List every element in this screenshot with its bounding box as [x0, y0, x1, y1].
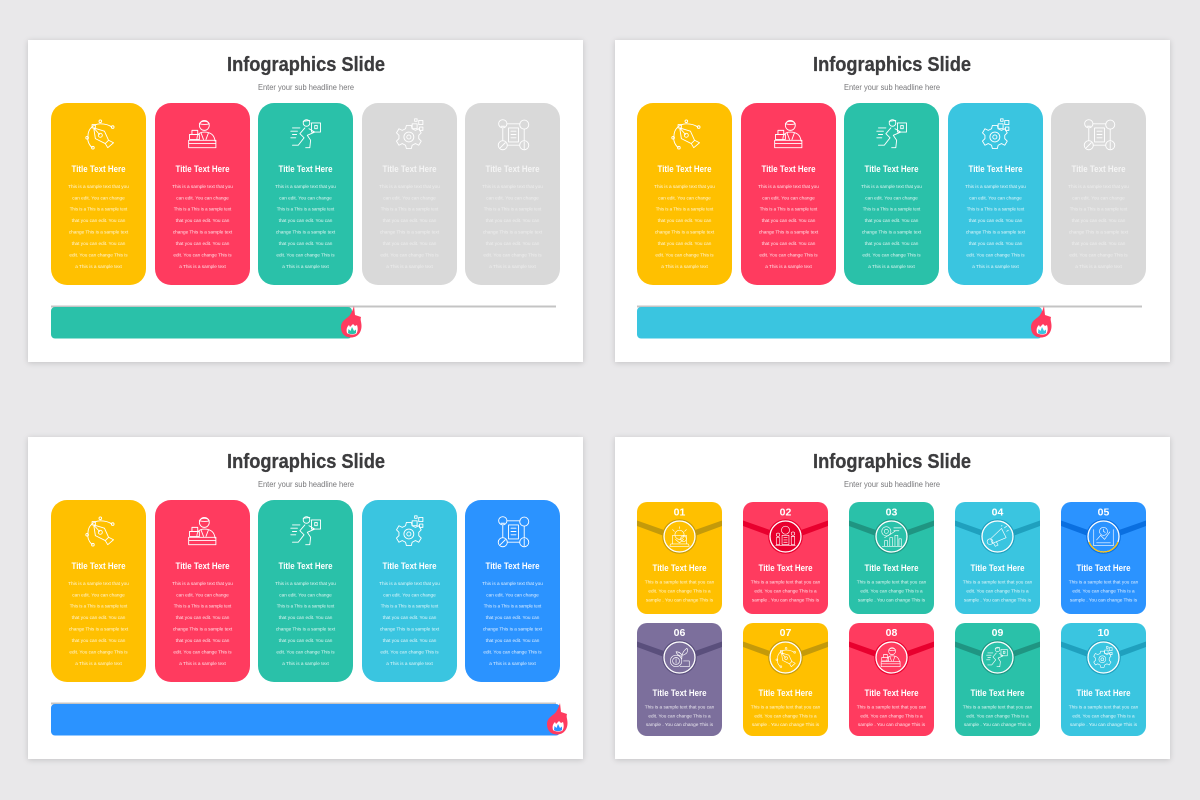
card: cyan gear: Title Text Here: [382, 561, 436, 571]
slide 3 panel: [28, 437, 583, 759]
card: yellow pen: Title Text Here: [72, 164, 126, 174]
progress track: [637, 306, 1142, 308]
progress bar: [51, 704, 560, 736]
card: red cashier: can edit. You can change: [762, 196, 815, 200]
card: yellow pen: [51, 103, 146, 285]
card: blue network: change This is a sample text: [483, 626, 543, 632]
card: cyan gear: that you can edit. You can: [969, 241, 1023, 246]
card: yellow pen: can edit. You can change: [72, 196, 125, 200]
card: cyan gear: edit. You can change This is: [380, 650, 439, 654]
card: teal runner: Title Text Here: [864, 164, 918, 174]
card: teal runner: can edit. You can change: [279, 196, 332, 200]
card: grey network: edit. You can change This is: [483, 252, 542, 258]
card: grey network: that you can edit. You can: [486, 241, 540, 246]
card 04: This is a sample text that you can: [963, 580, 1033, 584]
card: cyan gear: that you can edit. You can: [383, 638, 437, 643]
card: red cashier: that you can edit. You can: [762, 241, 816, 246]
slide 1: three of five highlighted: [28, 40, 583, 362]
card 04: edit. You can change This is a: [966, 588, 1029, 594]
card: yellow pen: This is a sample text that you: [68, 581, 129, 586]
card 07: 07: [780, 627, 791, 639]
card 10: [1061, 623, 1146, 736]
slide 3: all five highlighted: [28, 437, 583, 759]
icon: flame: [1031, 306, 1052, 338]
card: grey network: This is a This is a sample text: [1070, 206, 1128, 212]
card: cyan gear: change This is a sample text: [380, 626, 440, 632]
card: red cashier: can edit. You can change: [176, 196, 229, 200]
card 08: This is a sample text that you can: [857, 704, 927, 710]
card: red cashier: that you can edit. You can: [176, 218, 230, 223]
card: yellow pen: change This is a sample text: [69, 230, 129, 234]
card: teal runner: This is a sample text that you: [275, 581, 336, 586]
card: grey network: Title Text Here: [486, 164, 540, 174]
card: grey network: Title Text Here: [1072, 164, 1126, 174]
card: blue network: edit. You can change This is: [483, 650, 542, 654]
card 10: sample . You can change This is: [1070, 722, 1138, 727]
card: teal runner: This is a This is a sample text: [277, 604, 335, 608]
card: teal runner: [844, 103, 939, 285]
card: red cashier: change This is a sample text: [173, 230, 233, 234]
card: grey network: This is a sample text that you: [1068, 184, 1129, 189]
card 09: [955, 623, 1040, 736]
card: yellow pen: edit. You can change This is: [69, 252, 128, 258]
card 01: Title Text Here: [652, 563, 706, 573]
icon: flame: [341, 306, 362, 338]
card 09: 09: [992, 627, 1003, 639]
card: red cashier: Title Text Here: [762, 164, 816, 174]
progress bar: [51, 307, 352, 338]
card 08: Title Text Here: [864, 688, 918, 698]
card 06: edit. You can change This is a: [648, 714, 711, 718]
card: red cashier: that you can edit. You can: [176, 615, 230, 620]
card: blue network: that you can edit. You can: [486, 638, 540, 643]
card: teal runner: [258, 103, 353, 285]
card: teal runner: that you can edit. You can: [279, 218, 333, 223]
card: cyan gear: a This is a sample text: [972, 264, 1019, 269]
card: red cashier: edit. You can change This is: [173, 252, 232, 258]
card: yellow pen: Title Text Here: [658, 164, 712, 174]
card 09: edit. You can change This is a: [966, 714, 1029, 718]
card: cyan gear: can edit. You can change: [969, 196, 1022, 200]
card: blue network: can edit. You can change: [486, 592, 539, 598]
card 10: This is a sample text that you can: [1069, 704, 1139, 710]
card: grey network: that you can edit. You can: [486, 218, 540, 223]
card: grey network: This is a This is a sample text: [484, 206, 542, 212]
card 02: sample . You can change This is: [752, 598, 820, 602]
card 07: edit. You can change This is a: [754, 714, 817, 718]
slide 4 title: Infographics Slide: [813, 450, 971, 473]
card 05: 05: [1098, 506, 1109, 518]
card: yellow pen: change This is a sample text: [655, 230, 715, 234]
card: teal runner: [258, 500, 353, 682]
card: teal runner: that you can edit. You can: [279, 638, 333, 643]
card: grey gear: edit. You can change This is: [380, 252, 439, 258]
slide 2 subtitle: Enter your sub headline here: [844, 82, 940, 92]
card: teal runner: that you can edit. You can: [279, 241, 333, 246]
card: red cashier: change This is a sample text: [173, 626, 233, 632]
slide 2 panel: [615, 40, 1170, 362]
card: grey gear: [362, 103, 457, 285]
slide 4: ten numbered cards: [615, 437, 1170, 759]
card 05: sample . You can change This is: [1070, 598, 1138, 602]
card: red cashier: a This is a sample text: [179, 661, 226, 666]
card: blue network: This is a This is a sample text: [484, 604, 542, 608]
card: red cashier: [155, 500, 250, 682]
card 03: [849, 502, 934, 614]
card 08: 08: [886, 627, 897, 639]
card: red cashier: can edit. You can change: [176, 592, 229, 598]
card 09: This is a sample text that you can: [963, 704, 1033, 710]
card 06: 06: [674, 627, 685, 639]
card: grey network: change This is a sample text: [483, 230, 543, 234]
card: grey network: change This is a sample text: [1069, 230, 1129, 234]
card 06: [637, 623, 722, 736]
card 06: This is a sample text that you can: [645, 704, 715, 710]
card: red cashier: This is a sample text that you: [172, 184, 233, 189]
card: red cashier: edit. You can change This is: [173, 650, 232, 654]
slide 1 subtitle: Enter your sub headline here: [258, 82, 354, 92]
card: yellow pen: edit. You can change This is: [69, 650, 128, 654]
slide 2 title: Infographics Slide: [813, 53, 971, 76]
card: teal runner: This is a sample text that you: [275, 184, 336, 189]
card: grey network: edit. You can change This is: [1069, 252, 1128, 258]
card: teal runner: change This is a sample text: [862, 230, 922, 234]
card: yellow pen: can edit. You can change: [72, 592, 125, 598]
card 05: This is a sample text that you can: [1069, 580, 1139, 584]
card: grey gear: This is a sample text that you: [379, 184, 440, 189]
card: yellow pen: This is a sample text that you: [68, 184, 129, 189]
card: teal runner: edit. You can change This is: [276, 252, 335, 258]
card: grey gear: a This is a sample text: [386, 264, 433, 269]
card 08: [849, 623, 934, 736]
card: yellow pen: Title Text Here: [72, 561, 126, 571]
card: red cashier: that you can edit. You can: [176, 638, 230, 643]
slide 4 subtitle: Enter your sub headline here: [844, 479, 940, 489]
card: yellow pen: that you can edit. You can: [658, 241, 712, 246]
progress bar: [637, 307, 1042, 338]
card: cyan gear: This is a sample text that you: [965, 184, 1026, 189]
card 03: 03: [886, 506, 897, 518]
card: teal runner: a This is a sample text: [868, 264, 915, 269]
card: blue network: [465, 500, 560, 682]
card: blue network: a This is a sample text: [489, 661, 536, 666]
card 04: sample . You can change This is: [964, 598, 1032, 602]
card: grey network: a This is a sample text: [489, 264, 536, 269]
card 10: 10: [1098, 627, 1109, 639]
card: red cashier: Title Text Here: [176, 561, 230, 571]
card: teal runner: a This is a sample text: [282, 661, 329, 666]
card: teal runner: change This is a sample text: [276, 230, 336, 234]
card 02: This is a sample text that you can: [751, 580, 821, 584]
card: grey gear: change This is a sample text: [380, 230, 440, 234]
card: cyan gear: that you can edit. You can: [969, 218, 1023, 223]
card: yellow pen: that you can edit. You can: [72, 241, 126, 246]
card: red cashier: a This is a sample text: [179, 264, 226, 269]
card: blue network: that you can edit. You can: [486, 615, 540, 620]
card: teal runner: Title Text Here: [278, 164, 332, 174]
card 03: sample . You can change This is: [858, 598, 926, 602]
card 02: Title Text Here: [758, 563, 812, 573]
card: cyan gear: that you can edit. You can: [383, 615, 437, 620]
card 02: edit. You can change This is a: [754, 588, 817, 594]
card: grey gear: Title Text Here: [382, 164, 436, 174]
card 07: [743, 623, 828, 736]
card: teal runner: a This is a sample text: [282, 264, 329, 269]
card: blue network: Title Text Here: [486, 561, 540, 571]
card 03: edit. You can change This is a: [860, 588, 923, 594]
card: red cashier: [155, 103, 250, 285]
card: red cashier: change This is a sample text: [759, 230, 819, 234]
card 01: edit. You can change This is a: [648, 588, 711, 594]
card: yellow pen: that you can edit. You can: [72, 615, 126, 620]
card: grey gear: that you can edit. You can: [383, 241, 437, 246]
card: cyan gear: [362, 500, 457, 682]
card 03: This is a sample text that you can: [857, 580, 927, 584]
card 02: [743, 502, 828, 614]
card: cyan gear: change This is a sample text: [966, 230, 1026, 234]
card: yellow pen: [51, 500, 146, 682]
slide 1 title: Infographics Slide: [227, 53, 385, 76]
card: yellow pen: This is a This is a sample text: [70, 206, 128, 212]
card 07: sample . You can change This is: [752, 722, 820, 727]
card: teal runner: This is a sample text that you: [861, 184, 922, 189]
card: yellow pen: that you can edit. You can: [72, 638, 126, 643]
card: grey gear: This is a This is a sample text: [381, 206, 439, 212]
card 02: 02: [780, 506, 791, 518]
card: grey network: [465, 103, 560, 285]
card: teal runner: Title Text Here: [278, 561, 332, 571]
card: yellow pen: that you can edit. You can: [658, 218, 712, 223]
card: teal runner: that you can edit. You can: [865, 241, 919, 246]
card 04: Title Text Here: [970, 563, 1024, 573]
progress track: [51, 702, 556, 704]
card 04: [955, 502, 1040, 614]
card: cyan gear: This is a This is a sample text: [381, 604, 439, 608]
card: yellow pen: edit. You can change This is: [655, 252, 714, 258]
card: yellow pen: that you can edit. You can: [72, 218, 126, 223]
card 01: sample . You can change This is: [646, 598, 714, 602]
card 06: Title Text Here: [652, 688, 706, 698]
card: teal runner: change This is a sample text: [276, 626, 336, 632]
card: red cashier: that you can edit. You can: [762, 218, 816, 223]
card: grey gear: that you can edit. You can: [383, 218, 437, 223]
card: yellow pen: This is a This is a sample text: [656, 206, 714, 212]
card: cyan gear: This is a sample text that you: [379, 581, 440, 586]
card: red cashier: This is a sample text that you: [758, 184, 819, 189]
card 01: This is a sample text that you can: [645, 580, 715, 584]
card: cyan gear: edit. You can change This is: [966, 252, 1025, 258]
card 01: [637, 502, 722, 614]
slide 1 panel: [28, 40, 583, 362]
card: yellow pen: [637, 103, 732, 285]
card 05: edit. You can change This is a: [1072, 588, 1135, 594]
card: red cashier: edit. You can change This is: [759, 252, 818, 258]
card 01: 01: [674, 506, 685, 518]
card 10: edit. You can change This is a: [1072, 714, 1135, 718]
card: red cashier: This is a This is a sample text: [174, 604, 232, 608]
card 05: Title Text Here: [1076, 563, 1130, 573]
card: teal runner: can edit. You can change: [865, 196, 918, 200]
card: teal runner: edit. You can change This is: [862, 252, 921, 258]
slide 3 subtitle: Enter your sub headline here: [258, 479, 354, 489]
card: yellow pen: a This is a sample text: [661, 264, 708, 269]
card: red cashier: Title Text Here: [176, 164, 230, 174]
card: grey network: a This is a sample text: [1075, 264, 1122, 269]
card 07: This is a sample text that you can: [751, 704, 821, 710]
card 08: sample . You can change This is: [858, 722, 926, 727]
card: grey network: that you can edit. You can: [1072, 241, 1126, 246]
card: cyan gear: can edit. You can change: [383, 592, 436, 598]
card: teal runner: This is a This is a sample text: [277, 206, 335, 212]
card: cyan gear: a This is a sample text: [386, 661, 433, 666]
card 10: Title Text Here: [1076, 688, 1130, 698]
card: red cashier: a This is a sample text: [765, 264, 812, 269]
card: grey network: that you can edit. You can: [1072, 218, 1126, 223]
card: grey network: can edit. You can change: [1072, 196, 1125, 200]
icon: flame: [547, 703, 568, 734]
card: red cashier: This is a This is a sample text: [174, 206, 232, 212]
progress track: [51, 306, 556, 308]
card: cyan gear: [948, 103, 1043, 285]
slide 2: four of five highlighted: [615, 40, 1170, 362]
card 05: [1061, 502, 1146, 614]
card: blue network: This is a sample text that you: [482, 581, 543, 586]
card: teal runner: that you can edit. You can: [865, 218, 919, 223]
card: teal runner: This is a This is a sample text: [863, 206, 921, 212]
card: cyan gear: Title Text Here: [968, 164, 1022, 174]
card: grey network: can edit. You can change: [486, 196, 539, 200]
card 06: sample . You can change This is: [646, 722, 714, 727]
card: yellow pen: can edit. You can change: [658, 196, 711, 200]
card: red cashier: that you can edit. You can: [176, 241, 230, 246]
card 08: edit. You can change This is a: [860, 714, 923, 718]
card: yellow pen: This is a sample text that you: [654, 184, 715, 189]
card 09: Title Text Here: [970, 688, 1024, 698]
slide 4 panel: [615, 437, 1170, 759]
card: red cashier: This is a This is a sample text: [760, 206, 818, 212]
card 07: Title Text Here: [758, 688, 812, 698]
card: teal runner: can edit. You can change: [279, 592, 332, 598]
slide 3 title: Infographics Slide: [227, 450, 385, 473]
card: red cashier: This is a sample text that you: [172, 581, 233, 586]
card: grey gear: can edit. You can change: [383, 196, 436, 200]
card: teal runner: edit. You can change This is: [276, 650, 335, 654]
card: yellow pen: change This is a sample text: [69, 626, 129, 632]
card: yellow pen: a This is a sample text: [75, 264, 122, 269]
card: yellow pen: a This is a sample text: [75, 661, 122, 666]
card: red cashier: [741, 103, 836, 285]
card: teal runner: that you can edit. You can: [279, 615, 333, 620]
card: grey network: This is a sample text that you: [482, 184, 543, 189]
card: grey network: [1051, 103, 1146, 285]
card: yellow pen: This is a This is a sample text: [70, 604, 128, 608]
card 09: sample . You can change This is: [964, 722, 1032, 727]
card 03: Title Text Here: [864, 563, 918, 573]
card: cyan gear: This is a This is a sample text: [967, 206, 1025, 212]
card 04: 04: [992, 506, 1003, 518]
